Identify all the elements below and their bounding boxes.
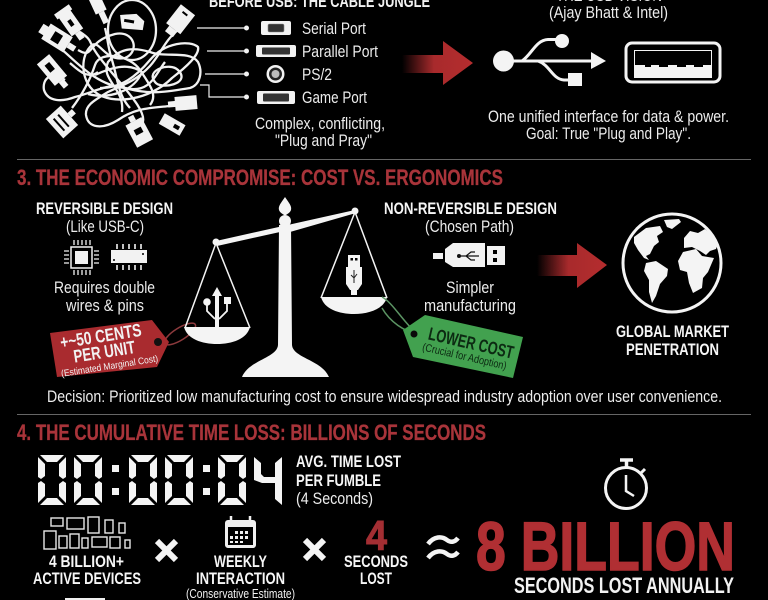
label: global market penetration: GLOBAL MARKET: [616, 322, 729, 341]
text: average time lost: PER FUMBLE: [296, 471, 381, 490]
text: average time lost: [296, 452, 401, 508]
subtitle: chosen path: (Chosen Path): [425, 217, 514, 236]
label: seconds lost: LOST: [360, 569, 392, 588]
operator: times: [157, 541, 176, 560]
factor: active devices: [33, 517, 141, 588]
illustration: balance scale: [184, 197, 387, 377]
illustration: tangled cables: [36, 0, 200, 148]
icon: stopwatch: [606, 460, 646, 508]
number: 4: 4: [366, 512, 388, 559]
label: global market penetration: PENETRATION: [626, 340, 719, 359]
heading: section 3: 3. THE ECONOMIC COMPROMISE: COST VS. ERGONOMICS: [17, 165, 503, 190]
icon: processor chip: [64, 240, 99, 275]
subtitle: like USB-C: (Like USB-C): [66, 217, 144, 236]
icon: USB trident in left pan: [203, 287, 231, 328]
digital timer: [38, 455, 282, 505]
label: 4 billion devices: 4 BILLION+: [49, 552, 124, 571]
icon: serial port: [261, 21, 291, 35]
text: simpler manufacturing: [424, 278, 516, 315]
text: unified interface: [488, 107, 729, 143]
operator: times: [305, 540, 324, 559]
title: non-reversible design: NON-REVERSIBLE DESIGN: [384, 199, 557, 218]
icon: USB-A port: [626, 43, 720, 82]
icon: USB plug in right pan: [346, 255, 362, 295]
label: seconds lost: [344, 552, 408, 588]
label: weekly interaction: INTERACTION: [196, 569, 285, 588]
icon: parallel port: [256, 45, 296, 57]
caption: complex, conflicting: Complex, conflicting,: [255, 114, 385, 133]
icon: USB trident symbol: [493, 34, 606, 86]
price tag: red extra cost: +~50 CENTS: [59, 320, 143, 352]
heading: section 4: 4. THE CUMULATIVE TIME LOSS: BILLIONS OF SECONDS: [17, 420, 486, 445]
icon: globe: [623, 214, 721, 312]
title: reversible design: REVERSIBLE DESIGN: [36, 199, 173, 218]
caption: complex, conflicting: [255, 114, 385, 150]
price tag: green lower cost: [382, 297, 523, 378]
label: serial port: Serial Port: [302, 19, 366, 38]
label: 4 billion devices: ACTIVE DEVICES: [33, 569, 141, 588]
text: average time lost: (4 Seconds): [296, 489, 373, 508]
label: 4 billion devices: [33, 552, 141, 588]
text: simpler manufacturing: Simpler: [446, 278, 494, 297]
icon: memory chip: [111, 244, 147, 270]
price tag: red extra cost: [50, 318, 198, 380]
caption: complex, conflicting: "Plug and Pray": [275, 131, 372, 150]
price tag: red extra cost: PER UNIT: [72, 337, 136, 367]
panel: non-reversible design: [384, 199, 557, 315]
heading: the USB vision: (Ajay Bhatt & Intel): [549, 3, 668, 22]
factor: weekly interaction: [186, 516, 295, 600]
panel: reversible design: [36, 199, 173, 315]
arrow: to global market: [537, 243, 607, 288]
label: game port: Game Port: [302, 88, 367, 107]
legend: legacy ports: [197, 19, 378, 107]
label: weekly interaction: [186, 552, 295, 600]
icon: horizontal USB plug: [433, 243, 505, 267]
text: average time lost: AVG. TIME LOST: [296, 452, 401, 471]
label: parallel port: Parallel Port: [302, 42, 378, 61]
text: requires double wires: wires & pins: [65, 296, 144, 315]
price tag: green lower cost: LOWER COST: [427, 324, 516, 363]
label: seconds lost: SECONDS: [344, 552, 408, 571]
icon: calendar: [225, 516, 256, 548]
operator: approximately: [428, 537, 458, 558]
price tag: red extra cost: (Estimated Marginal Cost): [60, 354, 159, 380]
icon: devices: [44, 517, 130, 549]
price tag: green lower cost: (Crucial for Adoption): [421, 341, 508, 373]
arrow: before to after USB: [402, 41, 473, 85]
icon: PS/2 port: [266, 65, 284, 83]
label: PS/2: PS/2: [302, 65, 332, 84]
text: requires double wires: Requires double: [54, 278, 155, 297]
factor: seconds lost: [344, 512, 408, 588]
label: global market penetration: [616, 322, 729, 359]
text: requires double wires: [54, 278, 155, 315]
label: weekly interaction: WEEKLY: [214, 552, 267, 571]
icon: game port: [257, 91, 295, 104]
text: simpler manufacturing: manufacturing: [424, 296, 516, 315]
text: unified interface: Goal: True "Plug and Play".: [526, 124, 691, 143]
